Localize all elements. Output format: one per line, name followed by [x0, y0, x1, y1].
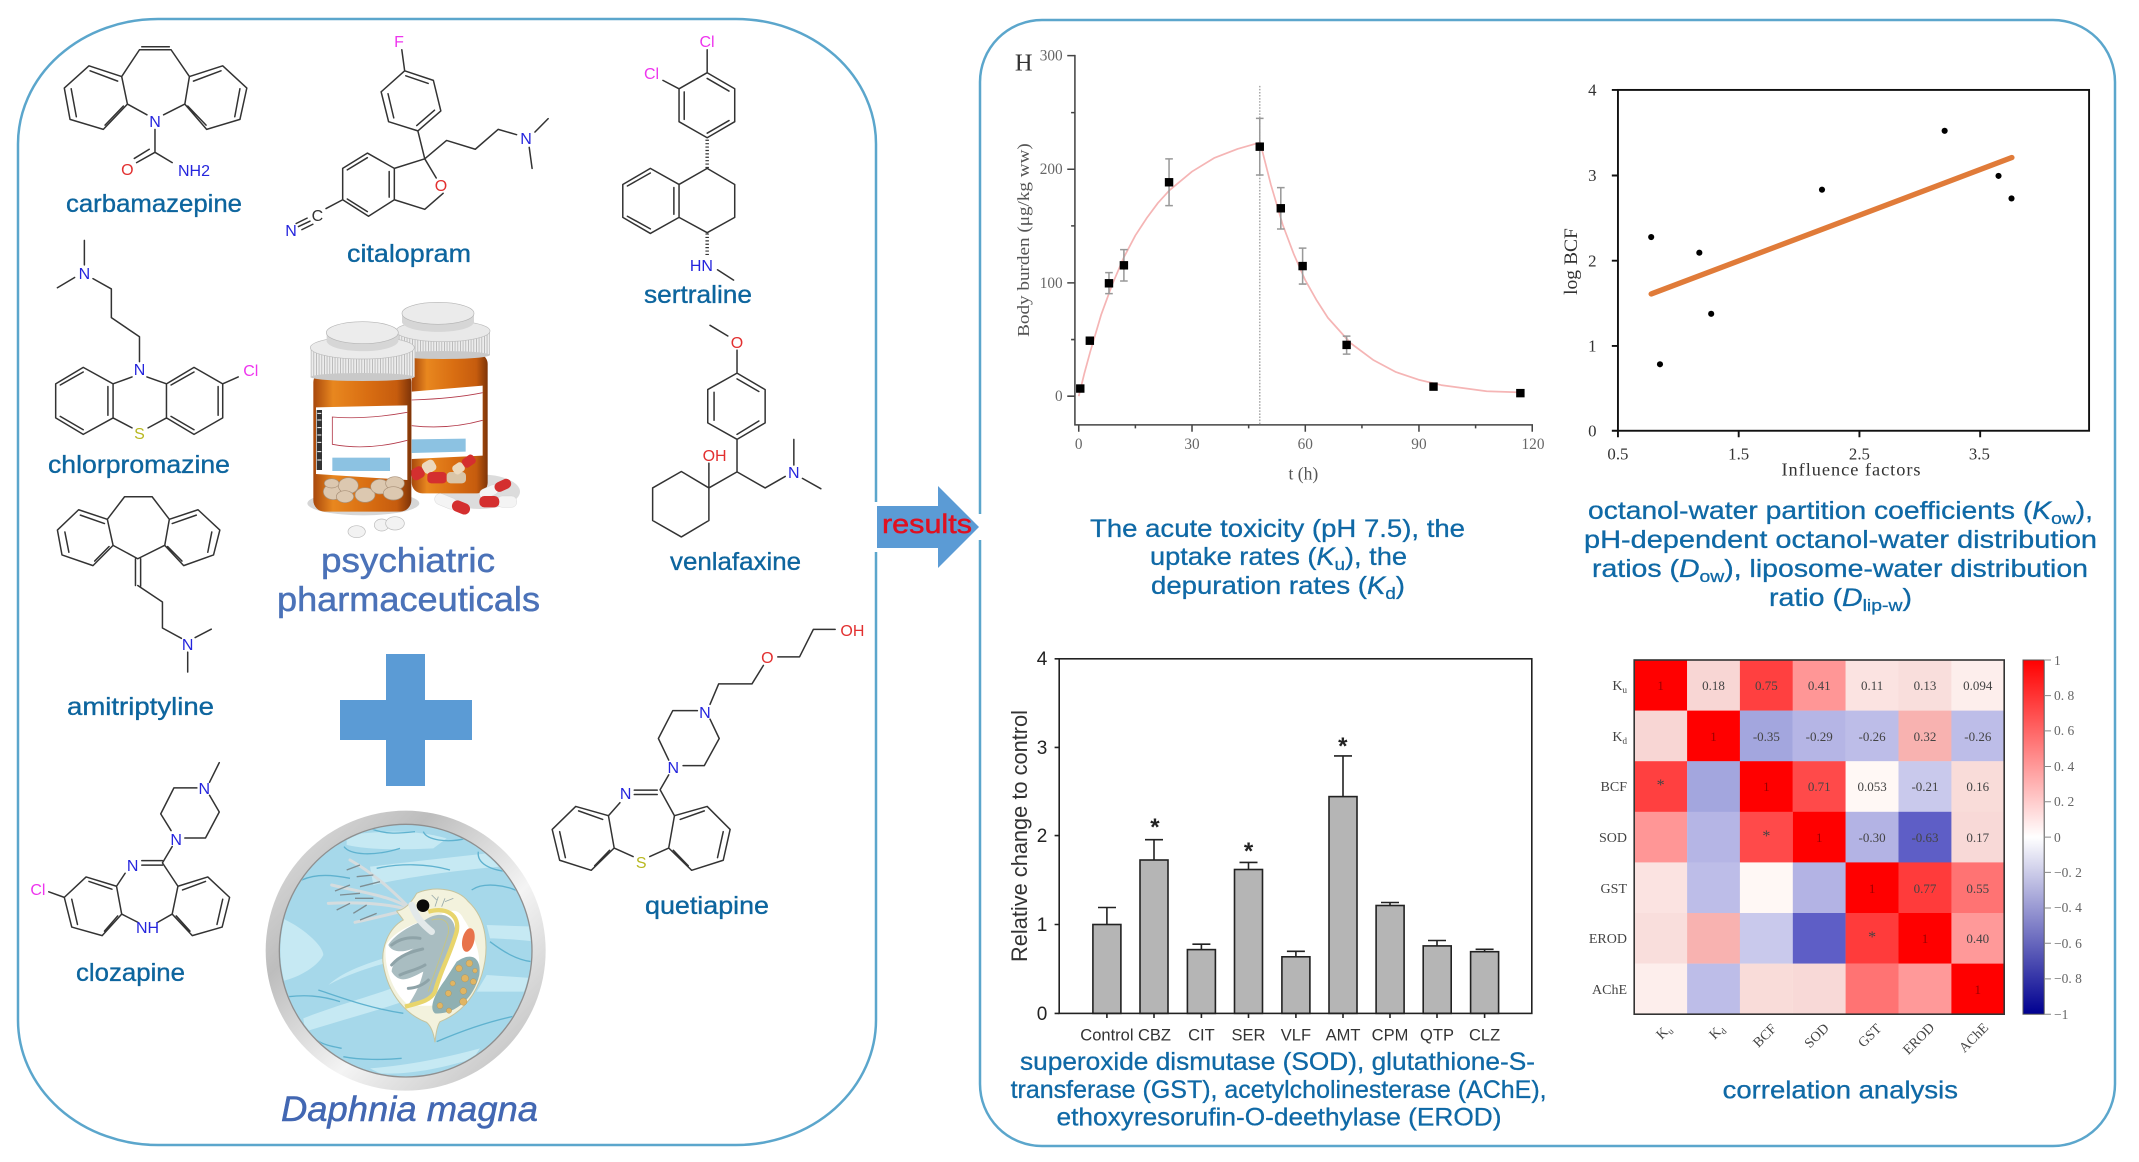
- axis tick labels: 0: [1055, 388, 1063, 405]
- y axis numbers: 1: [1037, 915, 1047, 936]
- axis tick labels: 60: [1298, 436, 1313, 453]
- significance stars: [1150, 733, 1348, 865]
- cell values: 0.094: [1963, 678, 1993, 693]
- molecule: chlorpromazine: S: [134, 426, 145, 443]
- axis labels: 1: [1588, 337, 1597, 356]
- colour scale bar: −0. 8: [2054, 971, 2082, 986]
- error bars: [1098, 756, 1494, 957]
- cell values: *: [1868, 929, 1876, 946]
- colour scale bar: 1: [2054, 653, 2061, 668]
- column labels: AChE: [1957, 1021, 1992, 1056]
- axis tick labels: [1040, 48, 1545, 453]
- colour scale bar: 0. 4: [2054, 759, 2074, 774]
- x axis categories: AMT: [1326, 1027, 1360, 1045]
- molecule: quetiapine: N: [699, 705, 711, 722]
- caption: partition coefficients: ratios ( D: [1592, 555, 1697, 583]
- colour scale bar: 0. 6: [2054, 723, 2074, 738]
- molecule: citalopram: O: [435, 178, 447, 195]
- molecule: quetiapine: S: [636, 855, 647, 872]
- column labels: BCF: [1751, 1022, 1780, 1051]
- cell values: 0.71: [1808, 779, 1831, 794]
- x axis categories: Control: [1080, 1027, 1134, 1045]
- row labels: d: [1622, 736, 1628, 746]
- caption: enzymes: superoxide dismutase (SOD), glutathione-S-: [1020, 1048, 1535, 1076]
- row labels: AChE: [1592, 983, 1627, 998]
- panel outline: right: [980, 20, 2115, 1146]
- cell values: -0.63: [1911, 830, 1939, 845]
- caption: partition coefficients: ow: [1700, 567, 1725, 586]
- axis labels: 3: [1588, 166, 1597, 185]
- axis tick labels: 300: [1040, 48, 1063, 65]
- y axis title: Relative change to control: [1007, 710, 1032, 962]
- cell values: 0.41: [1808, 678, 1831, 693]
- column labels: GST: [1856, 1021, 1885, 1051]
- x axis categories: QTP: [1420, 1027, 1454, 1045]
- column labels: K: [1654, 1025, 1672, 1043]
- x axis categories: SER: [1232, 1027, 1266, 1045]
- molecule: citalopram: C: [312, 208, 323, 225]
- cell values: 0.053: [1857, 779, 1887, 794]
- label: sertraline: sertraline: [644, 281, 752, 309]
- molecule: amitriptyline: N: [182, 637, 193, 654]
- row labels: SOD: [1599, 831, 1627, 846]
- axis labels: 1.5: [1728, 444, 1749, 463]
- label: carbamazepine: carbamazepine: [66, 190, 242, 218]
- icon: daphnia magna in a lens: [266, 811, 546, 1091]
- molecule: sertraline: [623, 34, 735, 280]
- cell values: 0.11: [1861, 678, 1883, 693]
- caption: partition coefficients: ow: [2051, 509, 2077, 528]
- molecule: quetiapine: N: [668, 760, 679, 777]
- chart: log BCF scatter: [1561, 81, 2089, 479]
- row labels: GST: [1601, 882, 1627, 897]
- caption: enzymes: [1011, 1048, 1547, 1132]
- x axis categories: [1080, 1027, 1500, 1045]
- y axis numbers: 0: [1037, 1004, 1047, 1025]
- molecule: chlorpromazine: N: [79, 266, 90, 283]
- axis titles: [1014, 50, 1318, 484]
- axis titles: Body burden (μg/kg ww): [1014, 143, 1033, 337]
- caption: partition coefficients: octanol-water partition coefficients ( K: [1588, 497, 2049, 525]
- significance stars: *: [1338, 733, 1348, 760]
- molecule: chlorpromazine: [56, 240, 258, 443]
- arrow: results: results: [882, 509, 972, 539]
- panel: results: [980, 20, 2115, 1146]
- label: citalopram: citalopram: [347, 240, 471, 268]
- column labels: EROD: [1901, 1021, 1938, 1058]
- caption: correlation analysis: correlation analysis: [1723, 1076, 1958, 1104]
- molecule: citalopram: [285, 34, 548, 240]
- molecule: sertraline: HN: [690, 258, 713, 275]
- bars: [1093, 797, 1499, 1013]
- colour scale bar: −0. 6: [2054, 936, 2082, 951]
- panel: substances: [18, 19, 876, 1145]
- cell values: 0.75: [1755, 678, 1778, 693]
- molecule: carbamazepine: [64, 47, 247, 180]
- molecule: quetiapine: N: [620, 786, 631, 803]
- icon: pill bottles: [307, 302, 520, 538]
- axis labels: 0: [1588, 421, 1597, 440]
- axis labels: 2: [1588, 251, 1597, 270]
- heading: psychiatric pharmaceuticals: [277, 542, 540, 619]
- molecule: clozapine: N: [127, 858, 138, 875]
- molecule: venlafaxine: OH: [703, 448, 727, 465]
- chart: body burden time course: [1014, 48, 1545, 484]
- colour scale bar: −0. 4: [2054, 900, 2082, 915]
- cell values: 0.18: [1702, 678, 1725, 693]
- x axis categories: CPM: [1372, 1027, 1408, 1045]
- column labels: K: [1707, 1025, 1725, 1043]
- column labels: d: [1718, 1026, 1729, 1036]
- axis labels: 4: [1588, 81, 1597, 100]
- axis labels: Influence factors: [1781, 459, 1921, 479]
- caption: acute toxicity: uptake rates ( K: [1150, 543, 1333, 571]
- molecule: citalopram: N: [520, 131, 532, 148]
- molecule: quetiapine: O: [761, 650, 774, 667]
- cell values: *: [1657, 777, 1665, 794]
- axis labels: 2.5: [1849, 444, 1870, 463]
- caption: partition coefficients: lip-w: [1863, 596, 1903, 615]
- axis labels: [1561, 81, 1990, 479]
- regression line: [1651, 158, 2012, 294]
- x axis categories: CLZ: [1469, 1027, 1500, 1045]
- heading: psychiatric pharmaceuticals: psychiatric: [321, 542, 495, 580]
- x axis categories: CIT: [1188, 1027, 1215, 1045]
- cell values: 0.16: [1966, 779, 1990, 794]
- error bars: [1105, 118, 1350, 354]
- plot frame and ticks: [1055, 659, 1532, 1018]
- axis titles: H: [1015, 50, 1033, 77]
- molecule: carbamazepine: N: [149, 114, 161, 131]
- label: amitriptyline: amitriptyline: [67, 693, 214, 721]
- molecule: clozapine: [30, 763, 230, 937]
- label: chlorpromazine: chlorpromazine: [48, 451, 230, 479]
- molecule: sertraline: Cl: [644, 66, 659, 83]
- molecule: citalopram: F: [394, 34, 404, 51]
- row labels: EROD: [1589, 932, 1627, 947]
- molecule: clozapine: N: [170, 832, 182, 849]
- axis labels: 0.5: [1607, 444, 1628, 463]
- molecule: venlafaxine: N: [788, 465, 800, 482]
- column labels: u: [1665, 1026, 1676, 1036]
- fitted curve: [1079, 142, 1520, 396]
- caption: acute toxicity: u: [1335, 555, 1345, 574]
- cell values: -0.21: [1911, 779, 1939, 794]
- caption: partition coefficients: ratio ( D: [1769, 584, 1860, 612]
- colour scale bar: 0. 8: [2054, 688, 2074, 703]
- caption: acute toxicity: [1090, 515, 1465, 603]
- cell values: -0.26: [1964, 729, 1992, 744]
- caption: partition coefficients: ): [1902, 584, 1912, 612]
- row labels: K: [1612, 730, 1622, 745]
- cell values: 0.13: [1914, 678, 1936, 693]
- caption: enzymes: ethoxyresorufin-O-deethylase (EROD): [1056, 1104, 1502, 1132]
- cell values: -0.29: [1806, 729, 1833, 744]
- label: clozapine: clozapine: [76, 959, 185, 987]
- x axis categories: CBZ: [1138, 1027, 1171, 1045]
- molecule: clozapine: N: [199, 781, 210, 798]
- colour scale bar: −1: [2054, 1007, 2068, 1022]
- x axis categories: VLF: [1281, 1027, 1311, 1045]
- y axis numbers: 4: [1037, 649, 1048, 670]
- caption: partition coefficients: [1584, 497, 2097, 615]
- cell values: 0.55: [1966, 881, 1989, 896]
- axis tick labels: 30: [1184, 436, 1200, 453]
- significance stars: *: [1150, 814, 1160, 841]
- cell values: 1: [1922, 931, 1928, 946]
- molecule: amitriptyline: [57, 497, 220, 672]
- molecule: sertraline: Cl: [699, 34, 715, 51]
- molecule: chlorpromazine: N: [134, 362, 145, 379]
- cell values: 0.17: [1966, 830, 1990, 845]
- y axis numbers: 3: [1037, 738, 1047, 759]
- axis labels: log BCF: [1561, 228, 1582, 295]
- cell values: [1657, 678, 1993, 997]
- caption: acute toxicity: ): [1396, 572, 1405, 600]
- molecule: venlafaxine: O: [731, 335, 743, 352]
- axis tick labels: 200: [1040, 161, 1063, 178]
- caption: acute toxicity: depuration rates ( K: [1151, 572, 1384, 600]
- panel outline: left: [18, 19, 876, 1145]
- cell values: 1: [1975, 982, 1981, 997]
- molecule: quetiapine: [552, 623, 864, 872]
- plot frame and ticks: [1612, 90, 2089, 437]
- molecule: citalopram: N: [285, 223, 297, 240]
- cell values: 0.40: [1966, 931, 1989, 946]
- y axis numbers: 2: [1037, 826, 1047, 847]
- molecule: chlorpromazine: Cl: [243, 363, 258, 380]
- cell values: 1: [1657, 678, 1664, 693]
- axis tick labels: 90: [1411, 436, 1427, 453]
- cell values: 1: [1869, 881, 1875, 896]
- label: venlafaxine: venlafaxine: [670, 548, 801, 576]
- caption: partition coefficients: ),: [2076, 497, 2093, 525]
- label: quetiapine: quetiapine: [645, 892, 769, 920]
- molecule: carbamazepine: O: [121, 162, 134, 179]
- column labels: [1654, 1021, 1992, 1058]
- colour scale bar: 0. 2: [2054, 794, 2074, 809]
- scatter points: [1648, 128, 2015, 367]
- axis tick labels: 100: [1040, 275, 1063, 292]
- row labels: BCF: [1601, 780, 1627, 795]
- row labels: K: [1612, 679, 1622, 694]
- significance stars: *: [1244, 838, 1254, 865]
- cell values: 1: [1816, 830, 1822, 845]
- row labels: u: [1622, 685, 1628, 695]
- heatmap cells: [1634, 660, 2004, 1014]
- row labels: [1589, 679, 1628, 998]
- molecule: clozapine: NH: [136, 920, 159, 937]
- cell values: -0.26: [1859, 729, 1886, 744]
- arrow: results: [872, 486, 984, 568]
- cell values: 0.77: [1914, 881, 1937, 896]
- cell values: *: [1762, 828, 1770, 845]
- label: Daphnia magna: Daphnia magna: [281, 1090, 538, 1129]
- cell values: 0.32: [1914, 729, 1936, 744]
- icon: plus sign: [340, 654, 472, 786]
- colour scale bar: −0. 2: [2054, 865, 2082, 880]
- caption: partition coefficients: ), liposome-water distribution: [1724, 555, 2088, 583]
- colour scale bar: [2023, 653, 2082, 1022]
- column labels: SOD: [1802, 1021, 1833, 1052]
- molecule: carbamazepine: NH2: [178, 163, 210, 180]
- axis labels: 3.5: [1969, 444, 1990, 463]
- y axis numbers: [1037, 649, 1048, 1025]
- caption: enzymes: transferase (GST), acetylcholinesterase (AChE),: [1011, 1076, 1547, 1104]
- cell values: -0.35: [1753, 729, 1780, 744]
- data points: [1076, 142, 1525, 397]
- chart axes: [1067, 55, 1533, 432]
- axis titles: t (h): [1288, 464, 1318, 484]
- colour scale bar: 0: [2054, 830, 2061, 845]
- cell values: 1: [1710, 729, 1717, 744]
- cell values: -0.30: [1859, 830, 1886, 845]
- caption: acute toxicity: The acute toxicity (pH 7.5), the: [1090, 515, 1465, 543]
- heading: psychiatric pharmaceuticals: pharmaceuticals: [277, 581, 540, 619]
- chart: enzyme bar chart: [1007, 649, 1532, 1045]
- caption: acute toxicity: d: [1385, 584, 1396, 603]
- molecule: venlafaxine: [653, 325, 821, 537]
- axis tick labels: 0: [1075, 436, 1083, 453]
- cell values: 1: [1763, 779, 1770, 794]
- caption: acute toxicity: ), the: [1345, 543, 1407, 571]
- chart: correlation heatmap: [1589, 653, 2082, 1058]
- molecule: clozapine: Cl: [30, 882, 45, 899]
- axis tick labels: 120: [1522, 436, 1545, 453]
- caption: partition coefficients: pH-dependent octanol-water distribution: [1584, 526, 2097, 554]
- molecule: quetiapine: OH: [840, 623, 864, 640]
